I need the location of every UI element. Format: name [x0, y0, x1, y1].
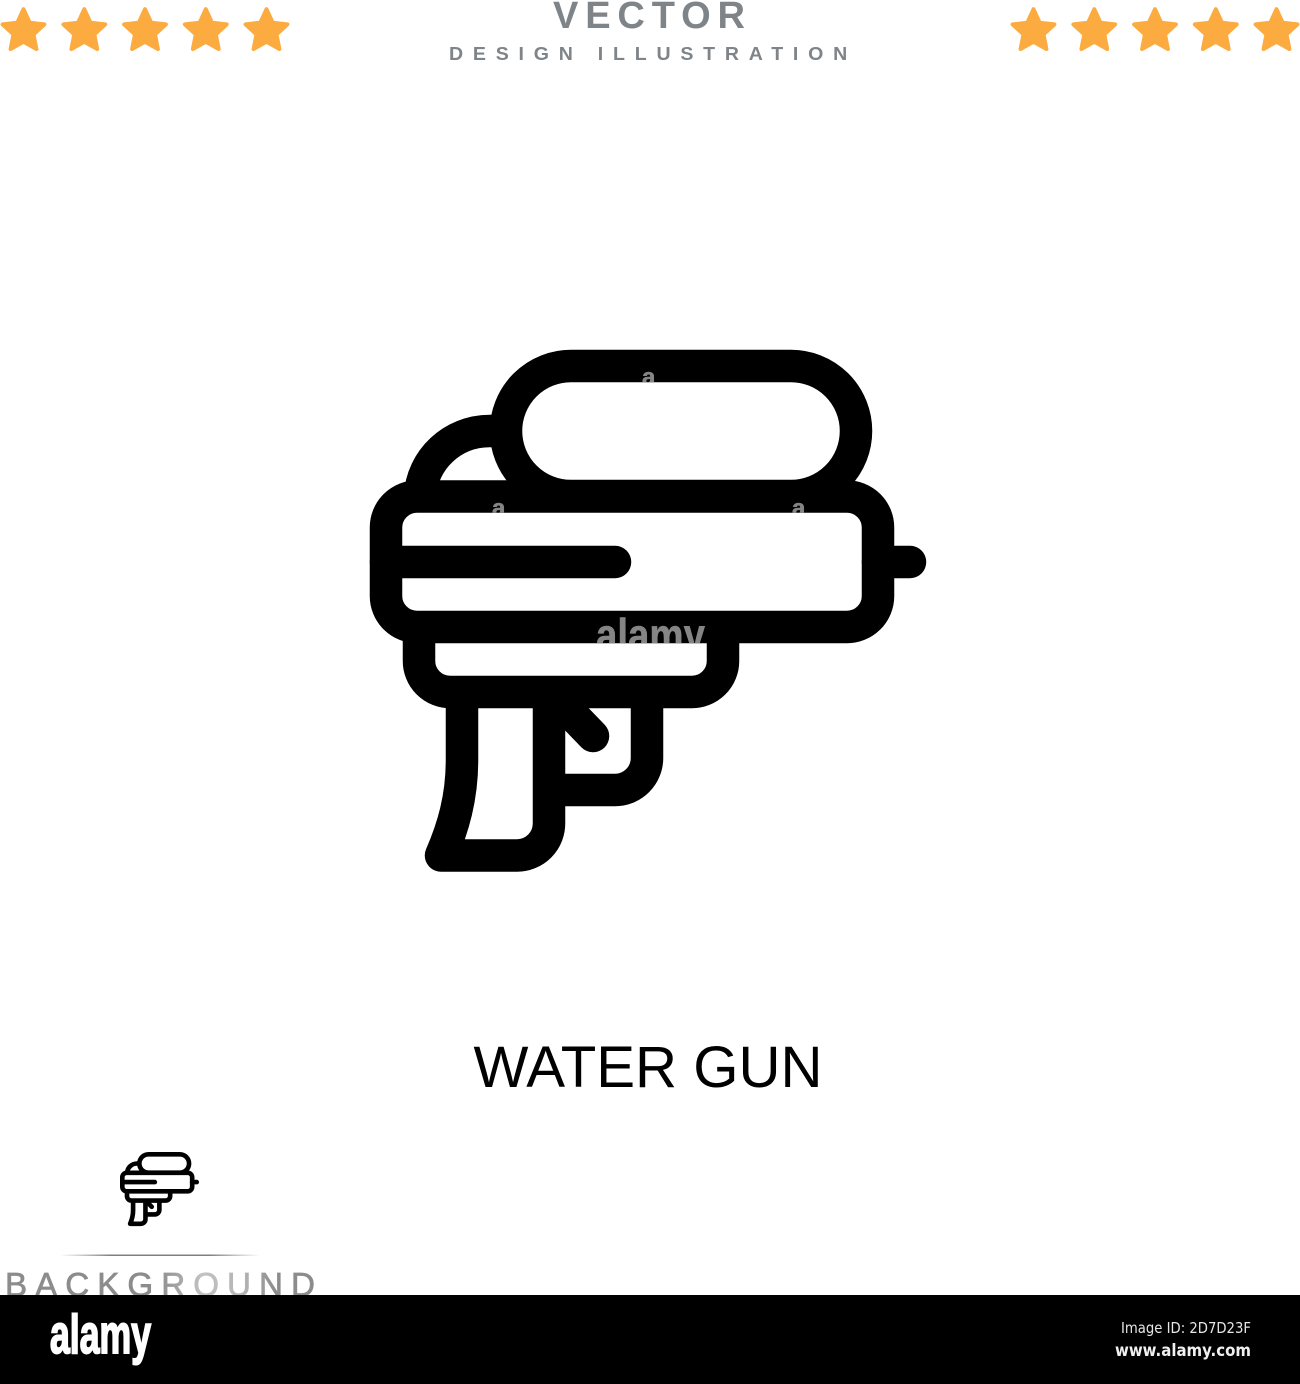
watermark fragments on icon: a — [792, 495, 806, 522]
label: background: BACKGROUND — [5, 1266, 323, 1303]
image id: Image ID: 2D7D23F — [1121, 1319, 1251, 1337]
star rating: left — [3, 9, 287, 49]
barrel body — [386, 496, 878, 627]
icon: water gun (main) — [386, 366, 910, 856]
icon: water gun (small) — [122, 1154, 197, 1224]
watermark fragments on icon: a — [642, 364, 656, 391]
footer bar — [0, 1295, 1300, 1384]
watermark fragments on icon: a — [492, 495, 506, 522]
body stripe — [386, 546, 615, 578]
logo: alamy: alamy — [50, 1303, 151, 1365]
subheading: design illustration: DESIGN ILLUSTRATION — [449, 44, 857, 64]
divider line — [60, 1254, 260, 1256]
watermark fragments on icon: alamy — [596, 609, 705, 661]
nozzle — [878, 546, 910, 578]
title: water gun: WATER GUN — [474, 1035, 822, 1100]
lower body — [419, 640, 723, 692]
watermark fragments on icon — [492, 364, 806, 661]
star rating: right — [1013, 9, 1297, 49]
rear dome — [420, 431, 506, 496]
trigger guard — [549, 692, 647, 790]
tank — [506, 366, 856, 496]
website url: www.alamy.com — [1115, 1341, 1251, 1360]
grip — [441, 700, 549, 856]
trigger — [565, 707, 593, 736]
